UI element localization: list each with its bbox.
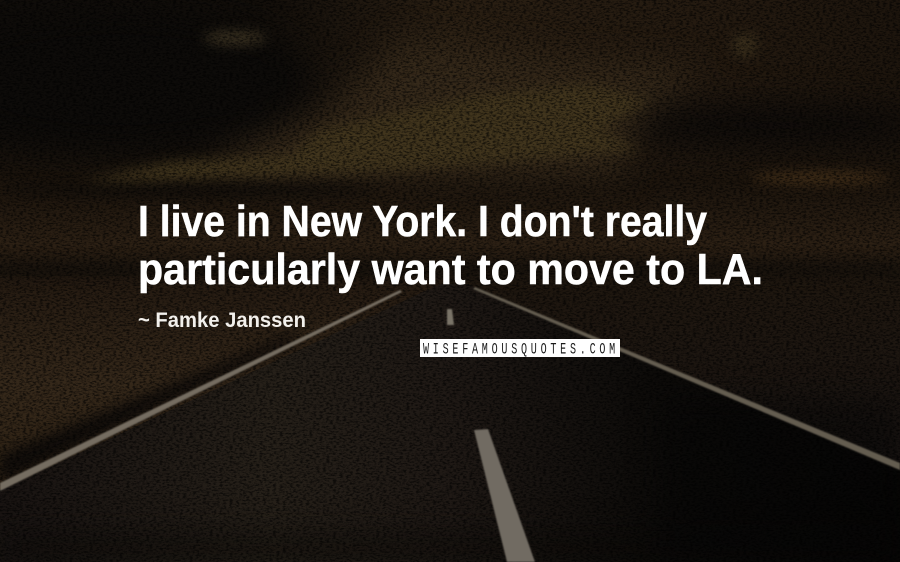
quote line 2: particularly want to move to LA. — [138, 245, 763, 294]
centre dash near — [474, 429, 535, 562]
quote text — [138, 197, 763, 294]
background: asphalt road — [0, 284, 900, 562]
road markings — [0, 287, 900, 562]
background: right desert ground — [450, 276, 900, 470]
background: dusk sky — [0, 0, 900, 290]
background: bottom vignette — [0, 400, 900, 562]
quote line 1: I live in New York. I don't really — [138, 197, 707, 246]
left road edge line — [0, 290, 402, 491]
right road edge line — [473, 287, 900, 470]
centre dash far — [447, 309, 454, 325]
attribution: ~ Famke Janssen — [138, 309, 306, 332]
background: left desert ground — [0, 276, 450, 492]
background: dark roadside shoulder — [0, 262, 900, 484]
watermark logo: WISEFAMOUSQUOTES.COM — [423, 342, 615, 359]
